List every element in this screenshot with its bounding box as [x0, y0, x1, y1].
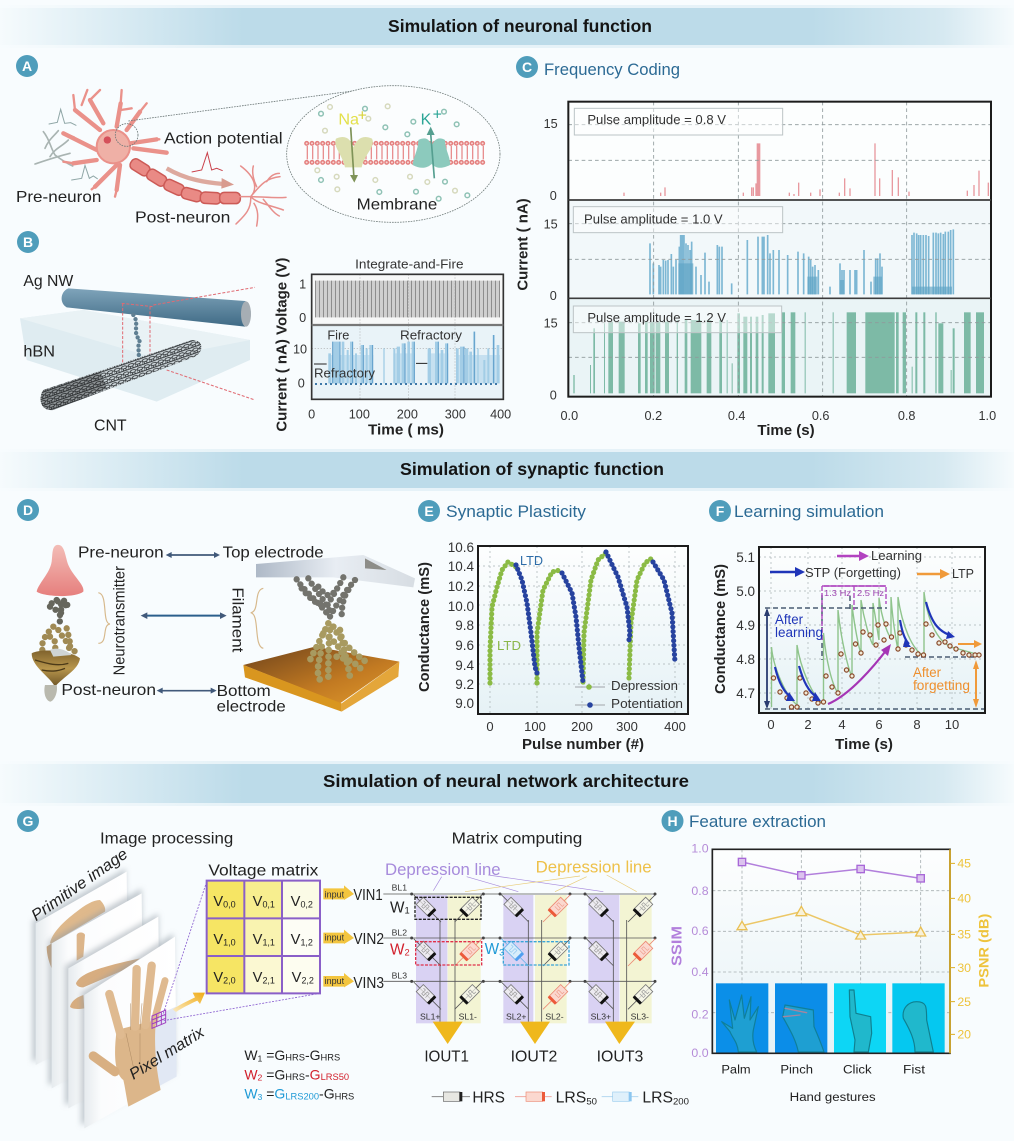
chart: integrate-and-fire: Current ( nA) Voltage (V): [275, 257, 291, 432]
weight equations: HRS: [321, 1053, 340, 1063]
chart labels: LTP: [952, 566, 974, 581]
frequency brackets: [822, 586, 886, 640]
labels for panel A: K: [421, 112, 432, 129]
voltage matrix: V: [213, 932, 223, 948]
chart labels and legend: Depression: [611, 678, 678, 693]
chart: integrate-and-fire: 200: [397, 408, 418, 422]
crossbar labels: IOUT2: [511, 1049, 557, 1066]
labels and axes: 1.0: [979, 409, 996, 423]
weight equations: LRS200: [285, 1091, 319, 1101]
chart frame: [478, 546, 688, 714]
arrows: vertical ranges: [764, 608, 982, 709]
weight equations: G: [310, 1066, 321, 1082]
badge B: [17, 231, 39, 253]
axis labels: 25: [957, 995, 971, 1009]
section heading: synaptic function: Simulation of synaptic function: [400, 459, 664, 479]
line: SSIM: [738, 858, 924, 882]
chart labels: 6: [875, 717, 883, 732]
icon: artificial synapse device: [243, 555, 415, 712]
callout dashed lines: [163, 882, 320, 1021]
chart labels and legend: 9.6: [455, 638, 474, 653]
chart labels and legend: 10.0: [448, 599, 474, 614]
voltage matrix: 2,0: [223, 975, 236, 985]
chart labels: 0: [767, 717, 775, 732]
labels for panel A: [16, 106, 442, 227]
device: hBN block, Ag nanowire, CNT: [20, 287, 255, 410]
chart: integrate-and-fire: Time ( ms): [368, 422, 444, 438]
panel title: Frequency Coding: [544, 61, 680, 79]
axis labels: [691, 842, 971, 1104]
depression line labels: [385, 858, 652, 892]
legend arrows: [770, 551, 950, 579]
panel F: learning simulation: Conductance (mS): [713, 564, 729, 694]
arrow: signal direction with action potential trace: [167, 153, 234, 189]
dashed reference lines: [765, 595, 985, 709]
badge D: D: [23, 502, 33, 518]
axis labels: Hand gestures: [790, 1090, 876, 1104]
legend: device states: LRS: [556, 1090, 586, 1107]
voltage matrix: V: [253, 932, 262, 948]
input arrows: input: [325, 889, 345, 899]
labels for panel D: [61, 544, 324, 715]
voltage matrix: 0,1: [262, 899, 275, 909]
icon: neuron cell body and dendrites: [63, 90, 167, 197]
crossbar labels: IOUT3: [597, 1049, 643, 1066]
badge B: B: [23, 234, 33, 250]
axis labels: Palm: [721, 1062, 751, 1076]
section heading: neuronal function: [0, 5, 1014, 48]
labels for panel D: Top electrode: [223, 544, 324, 561]
chart: integrate-and-fire: Integrate-and-Fire: [355, 258, 463, 272]
crossbar labels: W: [390, 941, 404, 958]
badge G: [17, 810, 39, 832]
crossbar labels: BL2: [392, 927, 407, 937]
chart frame: [759, 547, 985, 713]
chart labels: After: [775, 612, 803, 627]
voltage matrix: 1,2: [300, 937, 313, 947]
panel H: feature extraction: [662, 810, 992, 1104]
panel C: frequency coding: [515, 56, 996, 439]
labels for panel A: Post-neuron: [135, 210, 230, 227]
labels and axes: Pulse amplitude = 1.0 V: [584, 212, 723, 226]
crossbar labels: 1: [404, 906, 410, 916]
arrow: learning curve: [828, 644, 891, 704]
axis labels: 40: [957, 892, 971, 906]
icon: hand on front image: [93, 966, 165, 1107]
weight equations: 2: [258, 1073, 263, 1083]
labels and axes: 0.2: [645, 409, 662, 423]
image stack: primitive images: [32, 868, 177, 1128]
labels for panel A: +: [358, 108, 367, 125]
weight equations: -G: [319, 1086, 335, 1102]
labels for panel A: Na: [338, 112, 359, 129]
section heading: synaptic function: [0, 449, 1014, 491]
chart: integrate-and-fire: Fire: [327, 329, 349, 343]
op-amps: [433, 1022, 635, 1044]
voltage matrix: V: [292, 970, 301, 986]
crossbar column strips: [416, 895, 652, 1023]
legend boxes: [573, 108, 783, 333]
weight equations: W: [244, 1047, 258, 1063]
chart background and grid: [712, 849, 950, 1053]
badge C: [516, 56, 538, 78]
badge A: [16, 55, 38, 77]
panel E: synaptic plasticity: [417, 500, 688, 753]
chart labels and legend: 200: [571, 719, 593, 734]
icon: pixel matrix grid: [152, 1010, 166, 1028]
axis labels: 0.2: [691, 1007, 709, 1021]
voltage matrix: 1,1: [262, 937, 275, 947]
crossbar wires: [383, 894, 655, 1022]
voltage matrix: 2,1: [262, 975, 275, 985]
legend: device states: 200: [673, 1096, 689, 1106]
labels for panel D: Post-neuron: [61, 682, 156, 699]
weight equations: =: [262, 1086, 274, 1102]
chart: integrate-and-fire: [275, 257, 511, 438]
labels and axes: 0: [550, 388, 557, 402]
chart labels: 4.8: [736, 652, 755, 667]
weight equations: HRS: [285, 1072, 305, 1082]
crossbar labels: SL3-: [631, 1011, 649, 1021]
weight equations: =G: [262, 1066, 285, 1082]
weight equations: W: [244, 1066, 258, 1082]
chart labels: 2: [804, 717, 812, 732]
chart: 0.8 V spikes: [624, 143, 988, 196]
axis labels: Fist: [903, 1062, 926, 1076]
panel title: Synaptic Plasticity: [446, 503, 587, 521]
chart labels: forgetting: [913, 678, 970, 693]
labels and axes: 0.8: [898, 409, 915, 423]
badge E: [418, 500, 440, 522]
chart labels: Learning: [871, 548, 922, 563]
chart: integrate-and-fire: 1: [299, 278, 306, 292]
chart axes: [712, 849, 955, 1053]
weight equations: -: [305, 1066, 310, 1082]
device labels: CNT: [94, 418, 127, 435]
labels for panel D: Filament: [229, 587, 246, 653]
crossbar labels: SL1-: [459, 1011, 477, 1021]
chart labels and legend: LTD: [497, 638, 521, 653]
chart: integrate-and-fire: 10: [293, 342, 307, 356]
device labels: hBN: [23, 344, 55, 361]
panel E: synaptic plasticity: Conductance (mS): [417, 562, 433, 692]
depression line labels: Depression line: [536, 858, 652, 877]
chart: 1.0 V spikes: [650, 229, 953, 294]
weight equations: 3: [258, 1092, 263, 1102]
grid lines: [568, 102, 991, 397]
weight equations: G: [274, 1086, 285, 1102]
chart labels and legend: LTD: [520, 553, 543, 568]
chart labels: STP (Forgetting): [805, 565, 901, 580]
section heading: neural network architecture: [0, 761, 1014, 806]
voltage matrix: V: [253, 970, 262, 986]
legend: device states: [432, 1090, 689, 1107]
callout: dashed zoom lines and circle: [115, 86, 390, 146]
labels for panel A: +: [433, 106, 442, 123]
icon: Na channel: [335, 127, 373, 183]
axis labels: 30: [957, 961, 971, 975]
axis labels: 0.0: [691, 1046, 709, 1060]
crossbar labels: IOUT1: [424, 1049, 469, 1066]
panel B: memristor device and integrate-and-fire chart: [17, 231, 511, 438]
chart labels: [736, 548, 974, 732]
crossbar labels: VIN2: [353, 931, 384, 948]
voltage matrix: 0,0: [223, 899, 236, 909]
panel G: image processing and matrix computing: [17, 810, 689, 1128]
labels and axes: 0.0: [561, 409, 578, 423]
labels and axes: Pulse amplitude = 1.2 V: [587, 311, 727, 325]
panel H: feature extraction: PSNR (dB): [976, 914, 992, 988]
chart labels: learning: [775, 625, 823, 640]
labels for panel A: Pre-neuron: [16, 189, 101, 206]
crossbar labels: VIN1: [353, 887, 383, 904]
crossbar labels: SL1+: [420, 1011, 440, 1021]
voltage matrix: 1,0: [223, 937, 236, 947]
axis labels: 35: [957, 928, 971, 942]
icon: axon terminal branches: [236, 166, 286, 226]
labels and axes: Pulse amplitude = 0.8 V: [587, 113, 727, 127]
badge E: E: [424, 503, 434, 519]
axis labels: 0.4: [691, 965, 709, 979]
depression line labels: Depression line: [385, 860, 501, 879]
device labels: Ag NW: [23, 273, 74, 290]
axis labels: 20: [957, 1028, 971, 1042]
chart labels and legend: 400: [664, 719, 686, 734]
badge G: G: [23, 813, 34, 829]
crossbar labels: SL2-: [545, 1011, 564, 1021]
chart labels and legend: 100: [524, 719, 546, 734]
headings and italics for images: Primitive image: [29, 846, 131, 925]
chart: integrate-and-fire: Refractory: [314, 367, 376, 381]
axis labels: 1.0: [691, 842, 709, 856]
membrane ellipse inset: [287, 86, 500, 222]
panel C: frequency coding: Current ( nA): [515, 198, 531, 291]
input arrows: [323, 885, 354, 987]
headings and italics for images: Image processing: [100, 831, 233, 848]
icon: myelinated axon: [128, 157, 240, 204]
chart labels and legend: 300: [616, 719, 638, 734]
lipid bilayer: [307, 143, 487, 162]
trace: pulses and decay: [772, 592, 980, 707]
chart backgrounds: [568, 102, 991, 397]
voltage matrix: V: [253, 894, 262, 910]
arrow: pixel to matrix: [173, 993, 205, 1012]
chart labels and legend: 9.2: [455, 677, 474, 692]
legend: device states: LRS: [642, 1090, 673, 1107]
labels and axes: 15: [544, 217, 558, 231]
legend: device states: HRS: [472, 1090, 505, 1107]
chart: integrate-and-fire: 300: [445, 408, 466, 422]
chart labels and legend: [448, 540, 686, 734]
panel C: frequency coding: Time (s): [757, 423, 815, 439]
crossbar labels: 3: [499, 947, 504, 957]
crossbar labels: W: [390, 899, 404, 916]
labels for panel D: Neurotransmitter: [112, 565, 129, 675]
section heading: neuronal function: Simulation of neuronal function: [388, 16, 652, 36]
badge H: H: [667, 813, 678, 829]
icon: ions: [315, 104, 470, 201]
axis labels: 0.8: [691, 884, 709, 898]
scatter: conductance points: [774, 624, 979, 707]
frequency brackets: 2.5 Hz: [857, 588, 884, 598]
crossbar labels: BL3: [392, 971, 407, 981]
badge H: [662, 810, 684, 832]
badge D: [17, 499, 39, 521]
scatter: depression (green): [490, 553, 652, 683]
voltage matrix: V: [291, 894, 300, 910]
panel title: Feature extraction: [689, 813, 826, 831]
input arrows: input: [325, 933, 345, 943]
panel title: Learning simulation: [734, 503, 884, 521]
arrows: correspondence between biology and device: [141, 552, 227, 694]
chart: integrate-and-fire: 100: [349, 408, 370, 422]
labels and axes: 0: [550, 289, 557, 303]
icon: biological synapse: [32, 545, 83, 702]
chart: integrate-and-fire: 400: [490, 408, 511, 422]
axis labels: 45: [957, 857, 971, 871]
crossbar labels: VIN3: [353, 975, 384, 992]
chart: integrate-and-fire: Refractory: [400, 329, 463, 343]
panel H: feature extraction: SSIM: [669, 926, 685, 966]
chart labels: 4: [838, 717, 846, 732]
panel F: learning simulation: [709, 500, 985, 753]
badge A: A: [22, 58, 32, 74]
voltage matrix: V: [291, 932, 300, 948]
crossbar labels: [353, 883, 649, 1066]
chart: integrate-and-fire: 0: [299, 311, 306, 325]
labels for panel A: Action potential: [164, 130, 283, 147]
voltage matrix: 0,2: [300, 899, 313, 909]
chart frame: [568, 102, 991, 397]
voltage matrix: 2,2: [301, 975, 314, 985]
section heading: neural network architecture: Simulation of neural network architecture: [323, 771, 689, 791]
chart labels and legend: 10.6: [448, 540, 474, 555]
axis labels: 0.6: [691, 924, 709, 938]
crossbar labels: W: [485, 941, 499, 958]
chart labels: 5.1: [736, 550, 755, 565]
voltage matrix: V: [213, 894, 223, 910]
chart labels and legend: 0: [486, 719, 494, 734]
labels and axes: 0: [550, 189, 557, 203]
labels for panel D: Bottom: [217, 683, 271, 700]
chart labels: After: [913, 665, 941, 680]
crossbar labels: 2: [404, 948, 410, 958]
weight equations: W: [244, 1086, 258, 1102]
labels and axes: 0.6: [812, 409, 829, 423]
panel D: biological vs. artificial synapse: [17, 499, 415, 715]
chart: integrate-and-fire: 0: [298, 376, 305, 390]
icon: K channel: [413, 127, 450, 178]
input arrows: input: [325, 976, 345, 986]
labels and axes: 0.4: [728, 409, 745, 423]
weight equations: -G: [305, 1047, 321, 1063]
chart labels and legend: 10.2: [448, 579, 474, 594]
chart labels: 4.7: [736, 686, 755, 701]
headings and italics for images: Voltage matrix: [208, 862, 318, 879]
chart background: [478, 546, 688, 714]
weight equations: [244, 1047, 354, 1102]
badge F: F: [716, 503, 725, 519]
weight highlight boxes: [415, 897, 569, 965]
arrows: blue forgetting decays: [775, 602, 955, 701]
frequency brackets: 1.3 Hz: [824, 588, 851, 598]
panel F: learning simulation: Time (s): [835, 737, 893, 753]
chart: integrate-and-fire: 0: [308, 408, 315, 422]
voltage matrix: V: [213, 970, 223, 986]
weight equations: 1: [258, 1053, 263, 1063]
braces: [98, 588, 263, 648]
chart labels and legend: 9.4: [455, 658, 474, 673]
crossbar labels: SL3+: [591, 1011, 611, 1021]
axis labels: Pinch: [780, 1062, 813, 1076]
labels and axes: 15: [544, 117, 558, 131]
chart labels and legend: 10.4: [448, 559, 474, 574]
headings and italics for images: Pixel matrix: [126, 1023, 208, 1083]
weight equations: LRS50: [321, 1072, 349, 1082]
panel A: neuron and membrane: [16, 55, 500, 227]
panel E: synaptic plasticity: Pulse number (#): [522, 737, 644, 753]
chart: 1.2 V spikes: [573, 312, 984, 393]
icon: pre-neuron grey terminal and input spikes: [35, 109, 97, 180]
chart labels: 8: [913, 717, 921, 732]
labels for panel D: Pre-neuron: [78, 544, 164, 561]
axis labels: Click: [843, 1062, 873, 1076]
labels and axes: 15: [544, 316, 558, 330]
chart labels: 4.9: [736, 618, 755, 633]
gesture image tiles: [716, 983, 945, 1053]
headings and italics for images: [29, 831, 318, 1083]
legend: device states: 50: [586, 1096, 597, 1106]
chart labels and legend: Potentiation: [611, 696, 683, 711]
line: PSNR: [737, 906, 926, 939]
chart labels: 10: [945, 717, 959, 732]
voltage matrix: [207, 881, 320, 993]
crossbar labels: BL1: [392, 883, 407, 893]
device labels: [23, 273, 127, 435]
heading: matrix computing: Matrix computing: [452, 830, 582, 847]
scatter: potentiation (blue): [516, 552, 675, 682]
weight equations: HRS: [335, 1091, 354, 1101]
badge C: C: [522, 59, 532, 75]
chart labels and legend: 9.8: [455, 618, 474, 633]
chart background: [759, 547, 985, 713]
memristor cells: [410, 891, 659, 1013]
labels for panel A: Membrane: [357, 196, 437, 213]
labels for panel D: electrode: [217, 698, 286, 715]
labels and axes: [544, 113, 996, 423]
chart labels and legend: 9.0: [455, 696, 474, 711]
weight equations: HRS: [285, 1053, 305, 1063]
chart labels: 5.0: [736, 584, 755, 599]
weight equations: =G: [262, 1047, 285, 1063]
badge F: [709, 500, 731, 522]
crossbar labels: SL2+: [506, 1011, 526, 1021]
